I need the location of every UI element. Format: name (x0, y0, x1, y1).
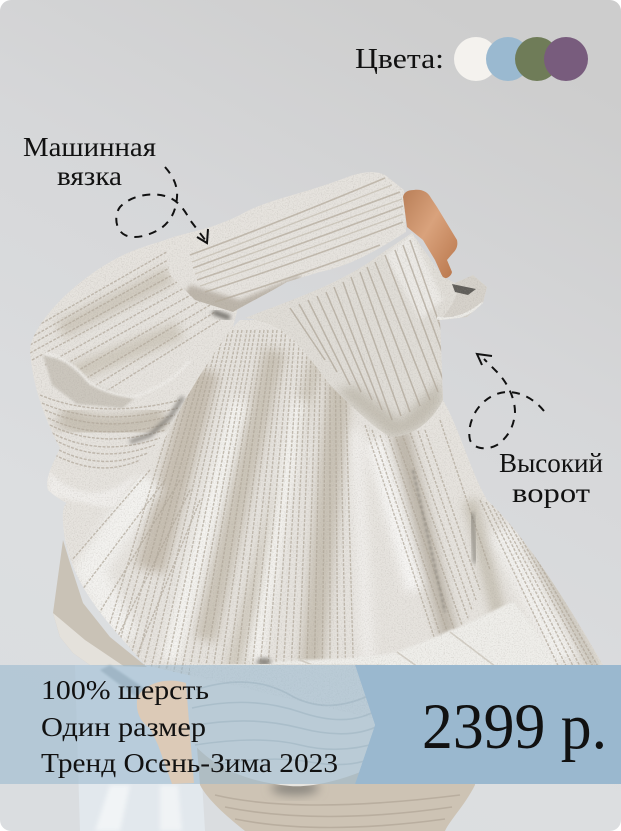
bottom cuff wool (100, 664, 385, 786)
label: high collar: ворот (512, 478, 590, 508)
label: machine knit: вязка (57, 161, 122, 191)
broad shading of torso ribs (90, 350, 596, 680)
inner lining of hem (53, 540, 147, 667)
price: 2399 р. (422, 691, 607, 763)
collar ribs (290, 240, 445, 420)
colour swatches (454, 37, 588, 81)
arrow: to knit sleeve (116, 167, 208, 243)
product facts: Тренд Осень-Зима 2023 (41, 748, 338, 778)
torso knit (63, 320, 602, 675)
sleeve ribs (30, 250, 220, 468)
forearm sleeve (167, 172, 406, 312)
translucent info ribbon (0, 665, 375, 784)
forearm ribs (190, 178, 403, 302)
label: high collar: Высокий (499, 448, 603, 478)
sweater hem (197, 748, 475, 831)
arrow: to collar (469, 354, 544, 448)
product facts: 100% шерсть (41, 675, 209, 705)
hand holding cuff (137, 681, 194, 784)
crease near right arm (472, 513, 475, 563)
colours heading: Цвета: (355, 44, 444, 75)
label: machine knit: Машинная (23, 132, 156, 162)
white shirt (78, 784, 205, 831)
top hand (403, 190, 457, 278)
solid price ribbon (355, 665, 621, 784)
fine torso ribs (72, 330, 600, 690)
knit speckle texture (20, 165, 610, 725)
product facts: Один размер (41, 712, 206, 742)
lower crossed sleeve (254, 603, 558, 665)
turtleneck collar (247, 233, 487, 437)
upper arm sleeve (30, 240, 238, 506)
